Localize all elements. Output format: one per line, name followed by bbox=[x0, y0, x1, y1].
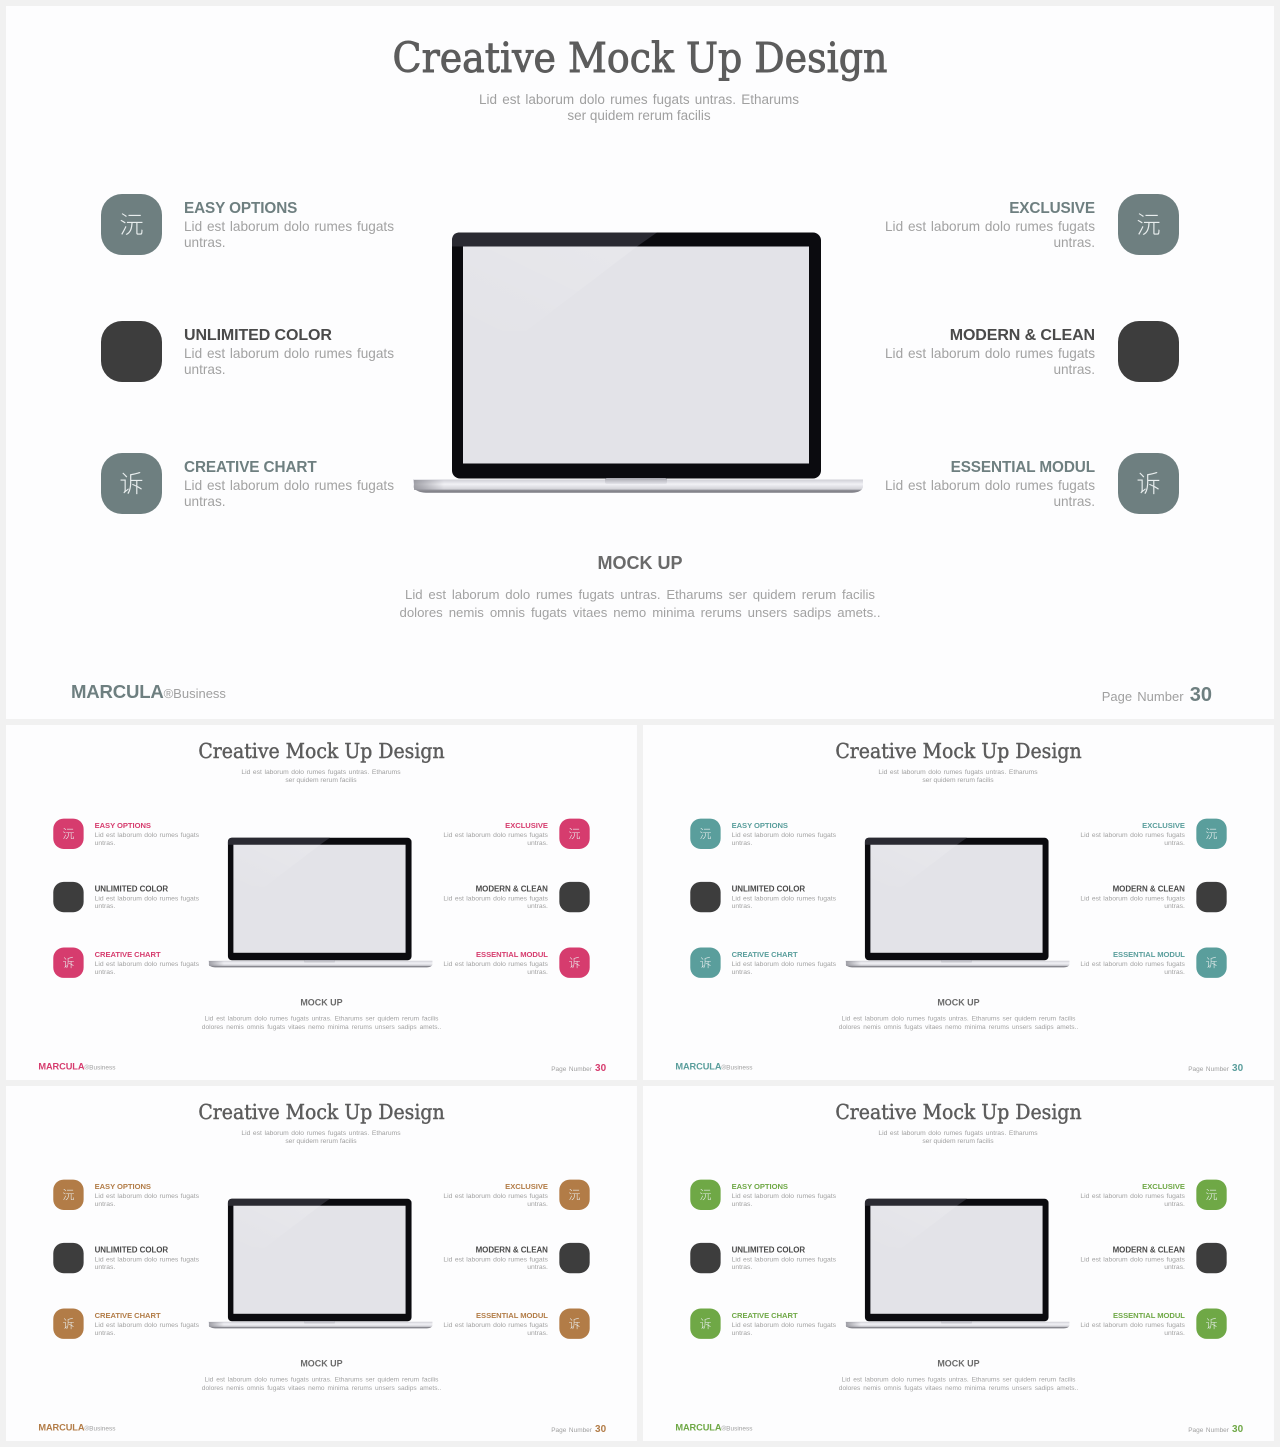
mock up description: dolores nemis omnis fugats vitaes nemo minima rerums unsers sadips amets.. bbox=[839, 1023, 1078, 1031]
subtitle bbox=[241, 1129, 401, 1144]
text: creative chart: untras. bbox=[732, 1329, 752, 1336]
icon: creative chart: 诉 bbox=[699, 953, 711, 970]
icon: easy options bbox=[101, 194, 162, 255]
text: creative chart bbox=[732, 1312, 836, 1336]
text: unlimited color: UNLIMITED COLOR bbox=[184, 327, 332, 344]
text: creative chart bbox=[94, 951, 199, 975]
mock up description: Lid est laborum dolo rumes fugats untras. Etharums ser quidem rerum facilis bbox=[842, 1375, 1075, 1383]
icon: creative chart bbox=[53, 948, 84, 978]
icon: exclusive: 沅 bbox=[1136, 205, 1160, 240]
subtitle bbox=[878, 1129, 1038, 1145]
page number: Page Number 30 bbox=[1102, 684, 1212, 706]
text: creative chart: Lid est laborum dolo rumes fugats bbox=[732, 960, 836, 967]
icon: easy options: 沅 bbox=[699, 1185, 711, 1203]
text: easy options bbox=[184, 200, 394, 250]
text: creative chart: Lid est laborum dolo rumes fugats bbox=[732, 1321, 836, 1328]
text: creative chart: CREATIVE CHART bbox=[95, 1312, 161, 1320]
icon: essential modul: 诉 bbox=[1206, 1314, 1217, 1331]
text: easy options: untras. bbox=[732, 839, 752, 846]
text: exclusive bbox=[443, 822, 548, 846]
text: creative chart: untras. bbox=[95, 1329, 115, 1336]
text: creative chart: Lid est laborum dolo rumes fugats bbox=[95, 1321, 199, 1328]
mock up description: dolores nemis omnis fugats vitaes nemo minima rerums unsers sadips amets.. bbox=[202, 1023, 441, 1031]
subtitle: Lid est laborum dolo rumes fugats untras. Etharums bbox=[878, 1129, 1038, 1136]
text: exclusive: Lid est laborum dolo rumes fugats bbox=[443, 1192, 548, 1200]
text: modern and clean: Lid est laborum dolo rumes fugats bbox=[885, 346, 1095, 361]
text: easy options: Lid est laborum dolo rumes fugats bbox=[184, 219, 394, 234]
icon: exclusive: 沅 bbox=[569, 824, 580, 842]
icon: unlimited color bbox=[101, 321, 162, 382]
subtitle bbox=[241, 768, 401, 784]
text: modern and clean: MODERN & CLEAN bbox=[950, 327, 1095, 344]
text: easy options: Lid est laborum dolo rumes fugats bbox=[732, 831, 836, 839]
text: easy options: EASY OPTIONS bbox=[732, 1183, 788, 1191]
text: unlimited color bbox=[732, 885, 836, 909]
icon: essential modul bbox=[1118, 453, 1179, 514]
text: modern and clean bbox=[443, 1246, 548, 1270]
text: unlimited color: UNLIMITED COLOR bbox=[95, 885, 168, 893]
text: creative chart: untras. bbox=[732, 968, 752, 975]
text: unlimited color: UNLIMITED COLOR bbox=[732, 1246, 805, 1254]
text: modern and clean: MODERN & CLEAN bbox=[476, 885, 548, 893]
mock up description: dolores nemis omnis fugats vitaes nemo minima rerums unsers sadips amets.. bbox=[400, 605, 880, 620]
text: exclusive: Lid est laborum dolo rumes fugats bbox=[1080, 1192, 1185, 1200]
icon: essential modul: 诉 bbox=[569, 1314, 580, 1331]
icon: unlimited color bbox=[53, 882, 84, 912]
icon: essential modul bbox=[559, 1309, 590, 1339]
text: easy options: untras. bbox=[95, 839, 115, 846]
text: easy options bbox=[95, 1183, 199, 1207]
subtitle: ser quidem rerum facilis bbox=[285, 776, 357, 783]
subtitle bbox=[479, 92, 799, 123]
text: exclusive bbox=[885, 200, 1095, 250]
text: exclusive: untras. bbox=[1164, 1200, 1185, 1207]
text: essential modul bbox=[443, 1312, 548, 1336]
text: essential modul: Lid est laborum dolo rumes fugats bbox=[443, 960, 548, 967]
icon: essential modul bbox=[559, 948, 590, 978]
text: creative chart: Lid est laborum dolo rumes fugats bbox=[95, 960, 199, 967]
text: easy options: EASY OPTIONS bbox=[184, 200, 297, 217]
text: easy options: Lid est laborum dolo rumes fugats bbox=[95, 831, 199, 839]
subtitle: Lid est laborum dolo rumes fugats untras. Etharums bbox=[878, 768, 1038, 775]
laptop mockup bbox=[208, 1198, 432, 1328]
title: Creative Mock Up Design bbox=[835, 1100, 1082, 1124]
text: modern and clean: MODERN & CLEAN bbox=[1113, 1246, 1185, 1254]
subtitle: Lid est laborum dolo rumes fugats untras. Etharums bbox=[241, 768, 401, 775]
mock up description: MOCK UP bbox=[937, 1358, 980, 1368]
icon: exclusive bbox=[1118, 194, 1179, 255]
laptop mockup bbox=[846, 838, 1070, 968]
mock up description: Lid est laborum dolo rumes fugats untras. Etharums ser quidem rerum facilis bbox=[405, 587, 875, 602]
text: modern and clean: Lid est laborum dolo rumes fugats bbox=[443, 1255, 548, 1263]
text: creative chart: CREATIVE CHART bbox=[732, 951, 798, 959]
icon: creative chart bbox=[53, 1309, 84, 1339]
text: essential modul: ESSENTIAL MODUL bbox=[476, 1312, 548, 1320]
icon: creative chart: 诉 bbox=[120, 464, 144, 499]
text: creative chart: untras. bbox=[184, 494, 226, 508]
icon: unlimited color bbox=[690, 882, 721, 912]
icon: modern and clean bbox=[1118, 321, 1179, 382]
mock up description: Lid est laborum dolo rumes fugats untras. Etharums ser quidem rerum facilis bbox=[205, 1014, 438, 1022]
icon: easy options: 沅 bbox=[62, 824, 74, 842]
text: creative chart bbox=[732, 951, 836, 975]
text: exclusive: untras. bbox=[527, 839, 548, 846]
text: modern and clean bbox=[1080, 885, 1185, 909]
text: unlimited color: Lid est laborum dolo rumes fugats bbox=[732, 1255, 836, 1263]
text: creative chart: CREATIVE CHART bbox=[732, 1312, 798, 1320]
icon: essential modul bbox=[1196, 948, 1227, 978]
text: unlimited color: UNLIMITED COLOR bbox=[732, 885, 805, 893]
mock up description: MOCK UP bbox=[598, 553, 682, 573]
text: exclusive: untras. bbox=[1164, 839, 1185, 846]
text: exclusive: Lid est laborum dolo rumes fugats bbox=[885, 219, 1095, 234]
panel: main slide (grey) bbox=[6, 6, 1274, 719]
text: exclusive: untras. bbox=[1053, 234, 1095, 250]
text: creative chart bbox=[94, 1312, 199, 1336]
text: modern and clean: Lid est laborum dolo rumes fugats bbox=[443, 894, 548, 902]
text: unlimited color: untras. bbox=[184, 362, 226, 376]
icon: modern and clean bbox=[1196, 1243, 1227, 1273]
mock up description: MOCK UP bbox=[937, 997, 980, 1007]
title: Creative Mock Up Design bbox=[393, 34, 887, 82]
icon: easy options bbox=[53, 819, 84, 849]
icon: modern and clean bbox=[559, 882, 590, 912]
mock up description: Lid est laborum dolo rumes fugats untras. Etharums ser quidem rerum facilis bbox=[205, 1375, 438, 1383]
text: unlimited color: Lid est laborum dolo rumes fugats bbox=[732, 894, 836, 902]
icon: creative chart bbox=[690, 948, 721, 978]
text: unlimited color: untras. bbox=[732, 1263, 752, 1270]
subtitle: ser quidem rerum facilis bbox=[567, 108, 711, 123]
mock up description: dolores nemis omnis fugats vitaes nemo minima rerums unsers sadips amets.. bbox=[839, 1384, 1078, 1392]
mock up description bbox=[400, 553, 880, 620]
text: creative chart: CREATIVE CHART bbox=[184, 459, 317, 476]
laptop mockup bbox=[842, 1196, 1076, 1335]
text: exclusive bbox=[1080, 1183, 1185, 1207]
mock up description: Lid est laborum dolo rumes fugats untras. Etharums ser quidem rerum facilis bbox=[842, 1014, 1075, 1022]
icon: easy options: 沅 bbox=[120, 205, 144, 240]
text: easy options bbox=[732, 1183, 836, 1207]
logo: MARCULA®Business bbox=[675, 1061, 752, 1072]
text: creative chart: CREATIVE CHART bbox=[95, 951, 161, 959]
icon: unlimited color bbox=[690, 1243, 721, 1273]
text: modern and clean bbox=[1080, 1246, 1185, 1271]
page number: Page Number 30 bbox=[1188, 1424, 1243, 1435]
panel: pink slide bbox=[6, 725, 637, 1080]
text: essential modul: ESSENTIAL MODUL bbox=[1113, 1312, 1185, 1320]
title: Creative Mock Up Design bbox=[198, 739, 445, 763]
laptop mockup bbox=[413, 232, 863, 493]
icon: essential modul: 诉 bbox=[1136, 464, 1160, 499]
icon: exclusive bbox=[559, 819, 590, 849]
text: modern and clean: untras. bbox=[1164, 902, 1185, 909]
mock up description bbox=[839, 997, 1078, 1031]
subtitle: ser quidem rerum facilis bbox=[285, 1137, 357, 1144]
text: essential modul bbox=[1080, 951, 1185, 975]
title: Creative Mock Up Design bbox=[198, 1100, 445, 1124]
text: easy options: untras. bbox=[732, 1200, 752, 1207]
icon: easy options bbox=[690, 819, 721, 849]
icon: creative chart: 诉 bbox=[62, 953, 74, 970]
icon: creative chart: 诉 bbox=[699, 1314, 711, 1331]
text: creative chart: untras. bbox=[95, 968, 115, 975]
text: essential modul: Lid est laborum dolo rumes fugats bbox=[1080, 960, 1185, 967]
text: essential modul: Lid est laborum dolo rumes fugats bbox=[1080, 1321, 1185, 1328]
text: modern and clean: Lid est laborum dolo rumes fugats bbox=[1080, 894, 1185, 902]
icon: essential modul bbox=[1196, 1309, 1227, 1339]
text: easy options: EASY OPTIONS bbox=[95, 822, 151, 830]
text: easy options: untras. bbox=[184, 234, 226, 250]
icon: easy options bbox=[53, 1180, 84, 1210]
text: essential modul: untras. bbox=[1053, 494, 1095, 508]
text: modern and clean: MODERN & CLEAN bbox=[1113, 885, 1185, 893]
text: creative chart bbox=[184, 459, 394, 508]
logo: MARCULA®Business bbox=[675, 1422, 752, 1433]
text: unlimited color: untras. bbox=[95, 1263, 115, 1270]
text: easy options: untras. bbox=[95, 1200, 115, 1207]
text: modern and clean bbox=[885, 327, 1095, 376]
text: easy options: EASY OPTIONS bbox=[95, 1183, 151, 1191]
text: exclusive: EXCLUSIVE bbox=[505, 822, 548, 830]
text: unlimited color bbox=[732, 1246, 836, 1271]
text: modern and clean: untras. bbox=[527, 902, 548, 909]
text: exclusive: Lid est laborum dolo rumes fugats bbox=[443, 831, 548, 839]
text: modern and clean: untras. bbox=[1053, 362, 1095, 376]
icon: exclusive bbox=[1196, 1180, 1227, 1210]
text: essential modul bbox=[885, 459, 1095, 508]
text: exclusive bbox=[443, 1183, 548, 1207]
laptop mockup bbox=[208, 838, 432, 968]
icon: unlimited color bbox=[53, 1243, 84, 1273]
text: unlimited color: Lid est laborum dolo rumes fugats bbox=[184, 346, 394, 361]
text: essential modul: untras. bbox=[527, 968, 548, 975]
logo: MARCULA®Business bbox=[38, 1422, 115, 1433]
text: modern and clean: MODERN & CLEAN bbox=[476, 1246, 548, 1254]
panel: teal slide bbox=[643, 725, 1274, 1080]
panel: green slide bbox=[643, 1086, 1274, 1441]
text: unlimited color: UNLIMITED COLOR bbox=[95, 1246, 168, 1254]
text: essential modul: ESSENTIAL MODUL bbox=[1113, 951, 1185, 959]
mock up description: dolores nemis omnis fugats vitaes nemo minima rerums unsers sadips amets.. bbox=[202, 1384, 441, 1392]
text: essential modul: untras. bbox=[1164, 968, 1185, 975]
icon: essential modul: 诉 bbox=[569, 953, 580, 970]
text: essential modul: untras. bbox=[527, 1329, 548, 1336]
text: easy options bbox=[95, 822, 199, 846]
icon: easy options: 沅 bbox=[62, 1185, 74, 1203]
icon: creative chart bbox=[690, 1309, 721, 1339]
icon: modern and clean bbox=[559, 1243, 590, 1273]
icon: essential modul: 诉 bbox=[1206, 953, 1217, 970]
text: unlimited color: untras. bbox=[732, 902, 752, 909]
icon: creative chart bbox=[101, 453, 162, 514]
text: exclusive: untras. bbox=[527, 1200, 548, 1207]
text: unlimited color: Lid est laborum dolo rumes fugats bbox=[95, 894, 199, 902]
text: unlimited color: untras. bbox=[95, 902, 115, 909]
subtitle bbox=[878, 768, 1038, 784]
text: essential modul bbox=[1080, 1312, 1185, 1336]
mock up description: MOCK UP bbox=[300, 1358, 343, 1368]
text: essential modul: Lid est laborum dolo rumes fugats bbox=[443, 1321, 548, 1328]
icon: exclusive bbox=[559, 1180, 590, 1210]
text: exclusive: EXCLUSIVE bbox=[505, 1183, 548, 1191]
icon: easy options: 沅 bbox=[699, 824, 711, 842]
text: unlimited color bbox=[95, 1246, 199, 1270]
mock up description: MOCK UP bbox=[300, 997, 343, 1007]
text: modern and clean: untras. bbox=[527, 1263, 548, 1270]
text: creative chart: Lid est laborum dolo rumes fugats bbox=[184, 478, 394, 493]
subtitle: ser quidem rerum facilis bbox=[922, 1137, 994, 1144]
text: exclusive: Lid est laborum dolo rumes fugats bbox=[1080, 831, 1185, 839]
logo: MARCULA®Business bbox=[38, 1061, 115, 1072]
text: essential modul bbox=[443, 951, 548, 975]
mock up description bbox=[202, 997, 441, 1031]
text: unlimited color: Lid est laborum dolo rumes fugats bbox=[95, 1255, 199, 1263]
text: exclusive: EXCLUSIVE bbox=[1142, 1183, 1185, 1191]
logo: MARCULA®Business bbox=[71, 681, 226, 702]
text: unlimited color bbox=[184, 327, 394, 376]
text: essential modul: ESSENTIAL MODUL bbox=[476, 951, 548, 959]
icon: exclusive: 沅 bbox=[1206, 824, 1217, 842]
text: easy options bbox=[732, 822, 836, 846]
text: essential modul: ESSENTIAL MODUL bbox=[951, 459, 1095, 476]
mock up description bbox=[834, 1357, 1083, 1393]
page number: Page Number 30 bbox=[551, 1063, 606, 1074]
title: Creative Mock Up Design bbox=[835, 739, 1082, 763]
icon: modern and clean bbox=[1196, 882, 1227, 912]
page number: Page Number 30 bbox=[551, 1424, 606, 1435]
text: essential modul: untras. bbox=[1164, 1329, 1185, 1336]
text: modern and clean: untras. bbox=[1164, 1263, 1185, 1270]
text: exclusive: EXCLUSIVE bbox=[1009, 200, 1095, 217]
text: exclusive bbox=[1080, 822, 1185, 846]
text: modern and clean bbox=[443, 885, 548, 909]
page number: Page Number 30 bbox=[1188, 1063, 1243, 1074]
icon: exclusive bbox=[1196, 819, 1227, 849]
text: easy options: EASY OPTIONS bbox=[732, 822, 788, 830]
subtitle: ser quidem rerum facilis bbox=[922, 776, 994, 783]
icon: exclusive: 沅 bbox=[1206, 1185, 1217, 1203]
text: unlimited color bbox=[95, 885, 199, 909]
icon: easy options bbox=[690, 1180, 721, 1210]
text: essential modul: Lid est laborum dolo rumes fugats bbox=[885, 478, 1095, 493]
icon: exclusive: 沅 bbox=[569, 1185, 580, 1203]
text: easy options: Lid est laborum dolo rumes fugats bbox=[95, 1192, 199, 1200]
panel: brown slide bbox=[6, 1086, 637, 1441]
text: exclusive: EXCLUSIVE bbox=[1142, 822, 1185, 830]
mock up description bbox=[197, 1357, 446, 1393]
subtitle: Lid est laborum dolo rumes fugats untras. Etharums bbox=[479, 92, 799, 107]
icon: creative chart: 诉 bbox=[62, 1314, 74, 1331]
subtitle: Lid est laborum dolo rumes fugats untras. Etharums bbox=[241, 1129, 401, 1136]
text: easy options: Lid est laborum dolo rumes fugats bbox=[732, 1192, 836, 1200]
text: modern and clean: Lid est laborum dolo rumes fugats bbox=[1080, 1255, 1185, 1263]
